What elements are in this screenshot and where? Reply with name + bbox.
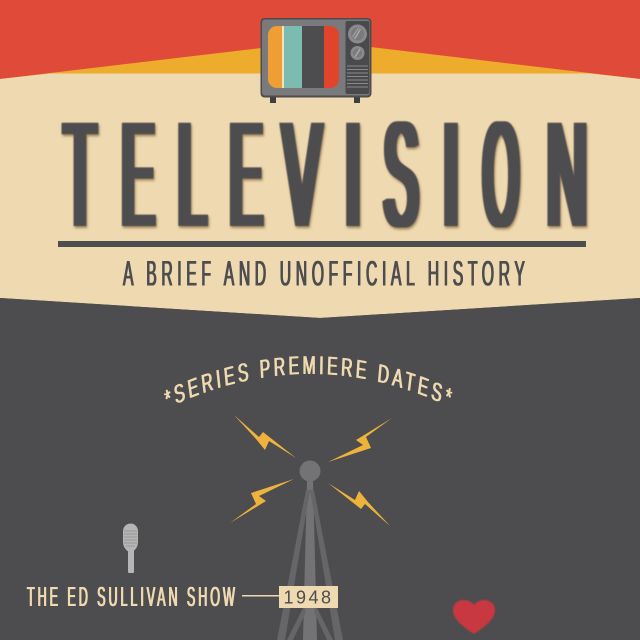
title: TELEVISION: N bbox=[547, 91, 587, 258]
icon: heart bbox=[453, 600, 495, 634]
subtitle: A BRIEF AND UNOFFICIAL HISTORY bbox=[123, 253, 525, 293]
title: TELEVISION: I bbox=[345, 92, 361, 259]
icon: lightning bolt top right bbox=[328, 418, 392, 462]
heading: series premiere dates: *SERIES PREMIERE DATES* bbox=[164, 356, 452, 403]
title: TELEVISION: T bbox=[64, 91, 96, 258]
title: TELEVISION bbox=[64, 90, 587, 259]
icon: lightning bolt bottom left bbox=[230, 479, 294, 523]
title: TELEVISION: V bbox=[283, 91, 321, 259]
date tag: 1948: 1948 bbox=[283, 588, 334, 608]
yellow rays behind television bbox=[0, 41, 640, 90]
title: TELEVISION: E bbox=[230, 90, 262, 258]
red sky background bbox=[0, 0, 640, 90]
title: TELEVISION: I bbox=[443, 92, 459, 259]
title: TELEVISION: L bbox=[178, 90, 206, 258]
label: The Ed Sullivan Show: THE ED SULLIVAN SHOW bbox=[27, 580, 235, 612]
title: TELEVISION: O bbox=[484, 92, 518, 259]
icon: lightning bolt top left bbox=[234, 415, 296, 458]
connector line bbox=[242, 595, 280, 596]
title: TELEVISION: E bbox=[122, 90, 154, 258]
title: TELEVISION: S bbox=[384, 91, 418, 258]
icon: lightning bolt bottom right bbox=[328, 483, 390, 526]
cream title band bbox=[0, 74, 640, 318]
broadcast tower bbox=[277, 460, 343, 640]
dark lower panel bbox=[0, 298, 640, 640]
title underline bbox=[58, 241, 586, 247]
icon: retro television bbox=[260, 18, 372, 103]
icon: microphone bbox=[123, 524, 138, 573]
